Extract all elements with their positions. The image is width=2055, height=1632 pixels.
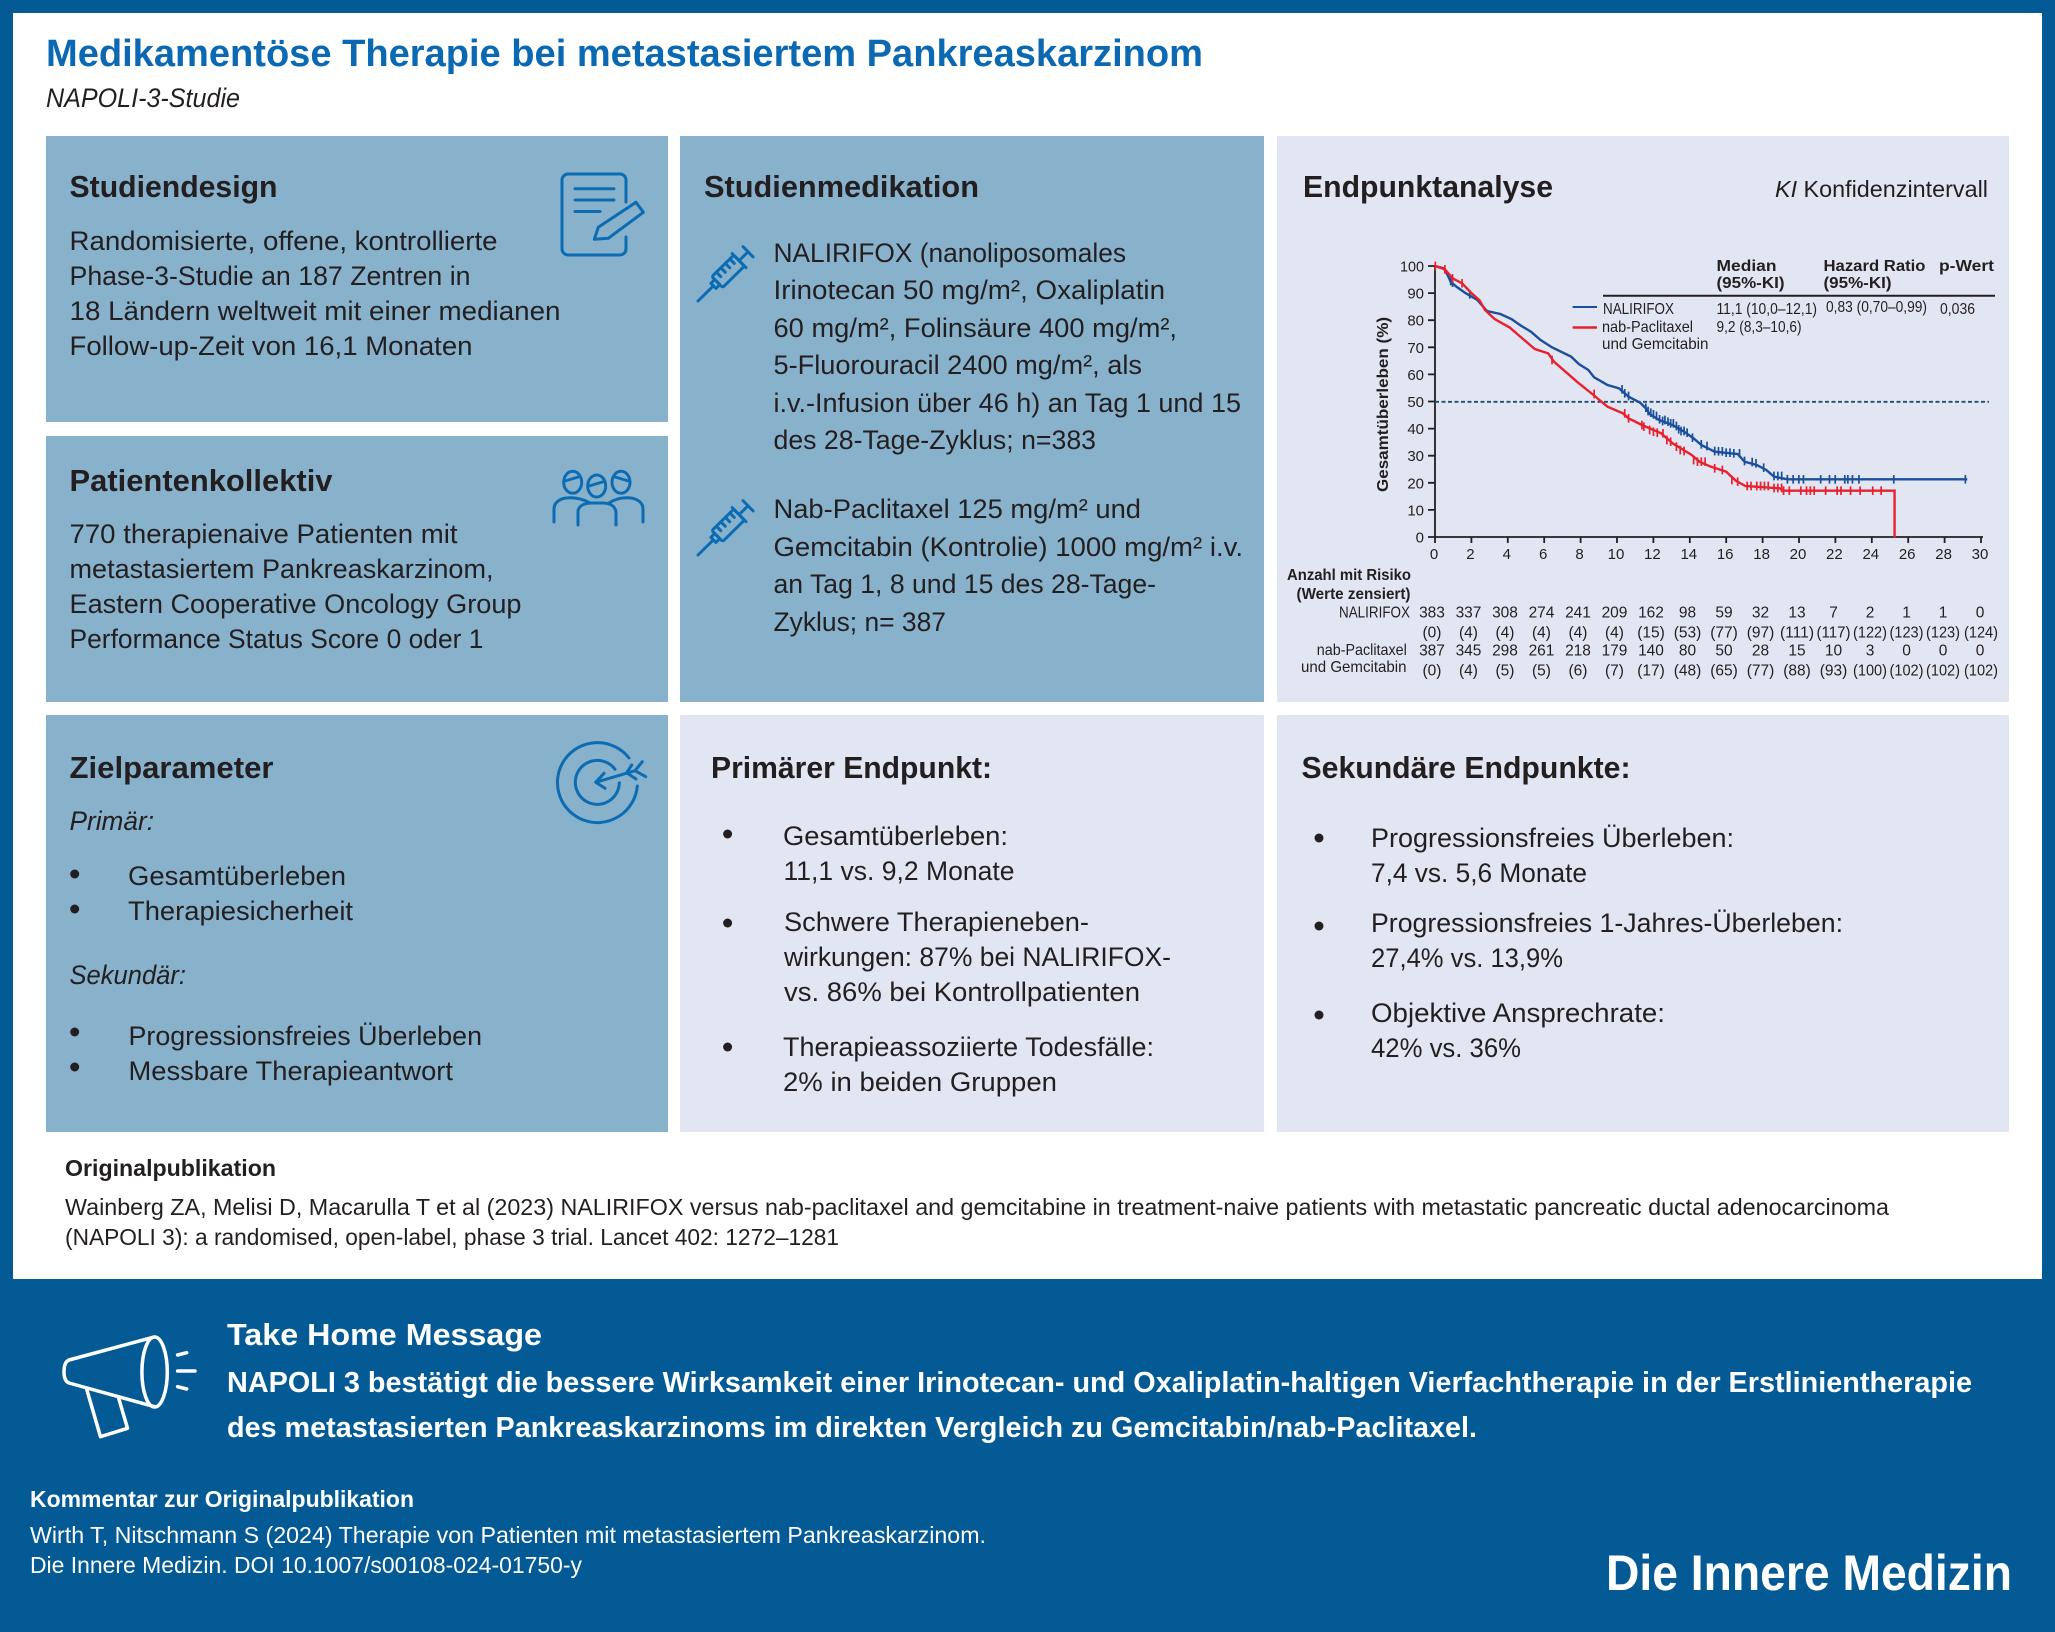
NALIRIFOX censored: (123) bbox=[1926, 624, 1960, 642]
body text: Follow-up-Zeit von 16,1 Monaten bbox=[70, 331, 472, 361]
panel: Zielparameter bbox=[46, 715, 668, 1132]
NALIRIFOX censored: (117) bbox=[1816, 624, 1850, 642]
primary list bbox=[70, 861, 353, 926]
body text: Eastern Cooperative Oncology Group bbox=[70, 589, 522, 619]
heading: Endpunktanalyse bbox=[1303, 169, 1553, 204]
x axis labels: 14 bbox=[1680, 546, 1697, 563]
take home message: NAPOLI 3 bestätigt die bessere Wirksamkeit einer Irinotecan- und Oxaliplatin-haltigen Vierfachtherapie in der Erstlinientherapie bbox=[227, 1367, 1972, 1399]
secondary list bbox=[70, 1021, 482, 1086]
row labels: Anzahl mit Risiko bbox=[1287, 567, 1411, 584]
nab-Paclitaxel at risk: 179 bbox=[1602, 642, 1627, 660]
nab-Paclitaxel censored: (0) bbox=[1423, 662, 1441, 680]
NALIRIFOX text: 5-Fluorouracil 2400 mg/m², als bbox=[774, 350, 1142, 380]
x axis labels: 12 bbox=[1644, 546, 1661, 563]
nab-Paclitaxel censored: (100) bbox=[1853, 662, 1887, 680]
result: one-year PFS: 27,4% vs. 13,9% bbox=[1371, 943, 1563, 973]
panel background bbox=[46, 436, 668, 702]
NALIRIFOX censored: (4) bbox=[1459, 624, 1478, 642]
x axis labels: 30 bbox=[1972, 546, 1988, 563]
result: treatment-related deaths bbox=[723, 1032, 1154, 1097]
panel: Studiendesign bbox=[46, 136, 668, 422]
nab-Paclitaxel at risk bbox=[1419, 642, 1985, 660]
NALIRIFOX censored: (4) bbox=[1496, 624, 1514, 642]
y axis labels: 10 bbox=[1407, 502, 1424, 519]
x axis labels: 8 bbox=[1575, 546, 1584, 563]
axes bbox=[1428, 266, 1983, 543]
NALIRIFOX at risk: 337 bbox=[1456, 604, 1481, 622]
legend and statistics: nab-Paclitaxel bbox=[1602, 319, 1693, 336]
row labels bbox=[1287, 567, 1411, 676]
panel background bbox=[1277, 715, 2009, 1132]
y axis labels: 50 bbox=[1407, 394, 1424, 411]
primary list: Therapiesicherheit bbox=[128, 896, 353, 926]
NALIRIFOX at risk: 0 bbox=[1976, 604, 1985, 622]
panel background bbox=[46, 715, 668, 1132]
nab-Paclitaxel at risk: 80 bbox=[1679, 642, 1696, 660]
panel: Studienmedikation bbox=[680, 136, 1264, 702]
x axis labels: 10 bbox=[1608, 546, 1624, 563]
x axis labels: 20 bbox=[1790, 546, 1806, 563]
NALIRIFOX censored: (53) bbox=[1674, 624, 1701, 642]
icon: syringe 2 bbox=[691, 499, 755, 562]
panel background bbox=[680, 136, 1264, 702]
heading: Studienmedikation bbox=[704, 169, 979, 204]
NALIRIFOX at risk: 162 bbox=[1638, 604, 1664, 622]
NALIRIFOX censored: (97) bbox=[1747, 624, 1774, 642]
row labels: NALIRIFOX bbox=[1339, 604, 1410, 622]
NALIRIFOX text bbox=[774, 238, 1241, 455]
nab-Paclitaxel censored: (48) bbox=[1674, 662, 1701, 680]
body text: 770 therapienaive Patienten mit bbox=[70, 519, 458, 549]
secondary label: Sekundär: bbox=[70, 960, 186, 990]
nab-Paclitaxel at risk: 0 bbox=[1939, 642, 1948, 660]
panel background bbox=[680, 715, 1264, 1132]
result: PFS: Progressionsfreies Überleben: bbox=[1371, 823, 1734, 853]
legend and statistics bbox=[1573, 299, 1975, 353]
Nab-Paclitaxel text: Nab-Paclitaxel 125 mg/m² und bbox=[774, 494, 1141, 524]
heading: Sekundäre Endpunkte: bbox=[1302, 750, 1630, 785]
result: adverse events: wirkungen: 87% bei NALIRIFOX- bbox=[783, 942, 1171, 972]
legend and statistics: und Gemcitabin bbox=[1602, 336, 1708, 353]
y axis labels bbox=[1400, 258, 1424, 546]
statistics table header: (95%-KI) bbox=[1716, 275, 1784, 292]
body text: 18 Ländern weltweit mit einer medianen bbox=[70, 296, 560, 326]
result: adverse events: Schwere Therapieneben- bbox=[784, 907, 1089, 937]
legend and statistics: 0,83 (0,70–0,99) bbox=[1826, 299, 1927, 316]
x axis labels: 4 bbox=[1503, 546, 1511, 563]
NALIRIFOX censored: (15) bbox=[1637, 624, 1665, 642]
nab-Paclitaxel at risk: 345 bbox=[1456, 642, 1481, 660]
table: number at risk bbox=[1287, 567, 1998, 680]
nab-Paclitaxel censored: (102) bbox=[1964, 662, 1998, 680]
statistics table header: p-Wert bbox=[1939, 258, 1995, 275]
nab-Paclitaxel censored: (65) bbox=[1710, 662, 1738, 680]
NALIRIFOX text: Irinotecan 50 mg/m², Oxaliplatin bbox=[774, 275, 1165, 305]
result: one-year PFS: Progressionsfreies 1-Jahres-Überleben: bbox=[1371, 908, 1843, 938]
result: treatment-related deaths: 2% in beiden Gruppen bbox=[783, 1067, 1057, 1097]
nab-Paclitaxel censored: (5) bbox=[1532, 662, 1551, 680]
nab-Paclitaxel censored: (102) bbox=[1926, 662, 1960, 680]
statistics table header bbox=[1603, 258, 1995, 296]
secondary list: Progressionsfreies Überleben bbox=[128, 1021, 482, 1051]
NALIRIFOX at risk: 383 bbox=[1419, 604, 1445, 622]
body text bbox=[70, 519, 522, 654]
y axis labels: 30 bbox=[1407, 448, 1424, 465]
result: response rate bbox=[1314, 998, 1665, 1063]
NALIRIFOX censored: (123) bbox=[1890, 624, 1924, 642]
panel background bbox=[46, 136, 668, 422]
nab-Paclitaxel censored bbox=[1423, 662, 1998, 680]
result: response rate: Objektive Ansprechrate: bbox=[1371, 998, 1665, 1028]
title: Medikamentöse Therapie bei metastasiertem Pankreaskarzinom bbox=[46, 33, 1203, 75]
NALIRIFOX at risk: 98 bbox=[1679, 604, 1696, 622]
NALIRIFOX text: i.v.-Infusion über 46 h) an Tag 1 und 15 bbox=[774, 388, 1241, 418]
y axis labels: 20 bbox=[1407, 475, 1424, 492]
original publication: Wainberg ZA, Melisi D, Macarulla T et al (2023) NALIRIFOX versus nab-paclitaxel and gemcitabine in treatment-naive patients with metastatic pancreatic ductal adenocarcinoma bbox=[65, 1194, 1889, 1220]
NALIRIFOX at risk: 241 bbox=[1565, 604, 1591, 622]
panel: Patientenkollektiv bbox=[46, 436, 668, 702]
curve: nab-Paclitaxel und Gemcitabin bbox=[1435, 262, 1895, 537]
heading: Zielparameter bbox=[70, 750, 274, 785]
x axis labels: 22 bbox=[1826, 546, 1843, 563]
panel background bbox=[1277, 136, 2009, 702]
NALIRIFOX at risk: 209 bbox=[1602, 604, 1627, 622]
y axis title: Gesamtüberleben (%) bbox=[1375, 317, 1392, 492]
NALIRIFOX censored: (111) bbox=[1780, 624, 1814, 642]
icon: megaphone bbox=[64, 1337, 195, 1437]
nab-Paclitaxel censored: (93) bbox=[1820, 662, 1847, 680]
result: overall survival: Gesamtüberleben: bbox=[783, 821, 1008, 851]
nab-Paclitaxel at risk: 298 bbox=[1492, 642, 1518, 660]
x axis labels: 0 bbox=[1430, 546, 1438, 563]
panel: Sekundäre Endpunkte bbox=[1277, 715, 2009, 1132]
result: one-year PFS bbox=[1314, 908, 1843, 973]
nab-Paclitaxel at risk: 28 bbox=[1752, 642, 1769, 660]
nab-Paclitaxel at risk: 15 bbox=[1788, 642, 1806, 660]
result: overall survival bbox=[723, 821, 1014, 886]
NALIRIFOX at risk: 1 bbox=[1939, 604, 1947, 622]
NALIRIFOX at risk: 308 bbox=[1492, 604, 1518, 622]
take home message: Take Home Message bbox=[227, 1317, 542, 1352]
nab-Paclitaxel censored: (7) bbox=[1605, 662, 1624, 680]
Nab-Paclitaxel text bbox=[774, 494, 1243, 637]
NALIRIFOX censored: (0) bbox=[1423, 624, 1441, 642]
NALIRIFOX at risk: 13 bbox=[1788, 604, 1806, 622]
nab-Paclitaxel censored: (5) bbox=[1496, 662, 1514, 680]
nab-Paclitaxel censored: (17) bbox=[1637, 662, 1665, 680]
y axis labels: 80 bbox=[1407, 313, 1424, 330]
y axis labels: 0 bbox=[1416, 530, 1424, 546]
secondary list: Messbare Therapieantwort bbox=[128, 1056, 453, 1086]
heading: Patientenkollektiv bbox=[70, 463, 333, 498]
original publication bbox=[65, 1155, 1889, 1250]
heading: Studiendesign bbox=[70, 169, 278, 204]
x axis labels: 26 bbox=[1899, 546, 1916, 563]
50 percent reference line bbox=[1435, 401, 1989, 403]
result: response rate: 42% vs. 36% bbox=[1371, 1033, 1521, 1063]
row labels: (Werte zensiert) bbox=[1296, 586, 1410, 603]
panel: Primärer Endpunkt bbox=[680, 715, 1264, 1132]
y axis labels: 40 bbox=[1407, 421, 1424, 438]
panel: Endpunktanalyse bbox=[1277, 136, 2009, 702]
x axis labels bbox=[1430, 546, 1988, 563]
result: adverse events bbox=[723, 907, 1171, 1007]
NALIRIFOX at risk: 59 bbox=[1715, 604, 1733, 622]
nab-Paclitaxel censored: (4) bbox=[1459, 662, 1478, 680]
commentary reference bbox=[30, 1486, 986, 1578]
icon: syringe 1 bbox=[691, 245, 755, 308]
commentary reference: Kommentar zur Originalpublikation bbox=[30, 1486, 414, 1512]
x axis labels: 28 bbox=[1935, 546, 1952, 563]
take home message: des metastasierten Pankreaskarzinoms im direkten Vergleich zu Gemcitabin/nab-Paclitaxel. bbox=[227, 1412, 1477, 1444]
body text: metastasiertem Pankreaskarzinom, bbox=[70, 554, 493, 584]
x axis labels: 18 bbox=[1753, 546, 1770, 563]
primary list: Gesamtüberleben bbox=[128, 861, 346, 891]
nab-Paclitaxel at risk: 140 bbox=[1638, 642, 1664, 660]
result: PFS: 7,4 vs. 5,6 Monate bbox=[1371, 858, 1587, 888]
nab-Paclitaxel at risk: 218 bbox=[1565, 642, 1591, 660]
icon: group of people bbox=[554, 471, 643, 525]
nab-Paclitaxel censored: (6) bbox=[1569, 662, 1587, 680]
nab-Paclitaxel censored: (88) bbox=[1783, 662, 1811, 680]
icon: target with arrow bbox=[557, 743, 646, 823]
nab-Paclitaxel at risk: 261 bbox=[1529, 642, 1554, 660]
icon: document with pencil bbox=[562, 174, 643, 255]
result: PFS bbox=[1314, 823, 1734, 888]
legend and statistics: 0,036 bbox=[1940, 301, 1975, 318]
nab-Paclitaxel censored: (102) bbox=[1890, 662, 1924, 680]
NALIRIFOX text: 60 mg/m², Folinsäure 400 mg/m², bbox=[774, 313, 1177, 343]
NALIRIFOX at risk: 7 bbox=[1829, 604, 1838, 622]
statistics table header: Median bbox=[1716, 258, 1776, 275]
NALIRIFOX censored: (77) bbox=[1710, 624, 1738, 642]
body text: Phase-3-Studie an 187 Zentren in bbox=[70, 261, 470, 291]
nab-Paclitaxel censored: (77) bbox=[1747, 662, 1774, 680]
result: overall survival: 11,1 vs. 9,2 Monate bbox=[784, 856, 1014, 886]
Nab-Paclitaxel text: an Tag 1, 8 und 15 des 28-Tage- bbox=[774, 569, 1156, 599]
x axis labels: 2 bbox=[1466, 546, 1475, 563]
chart: Kaplan-Meier survival bbox=[1375, 258, 1995, 563]
nab-Paclitaxel at risk: 3 bbox=[1866, 642, 1874, 660]
NALIRIFOX text: NALIRIFOX (nanoliposomales bbox=[774, 238, 1126, 268]
result: treatment-related deaths: Therapieassoziierte Todesfälle: bbox=[783, 1032, 1154, 1062]
Nab-Paclitaxel text: Gemcitabin (Kontrolie) 1000 mg/m² i.v. bbox=[774, 532, 1243, 562]
legend and statistics: 9,2 (8,3–10,6) bbox=[1716, 319, 1802, 336]
original publication: Originalpublikation bbox=[65, 1155, 276, 1181]
result: adverse events: vs. 86% bei Kontrollpatienten bbox=[784, 977, 1140, 1007]
abbreviation note: KI Konfidenzintervall bbox=[1775, 176, 1988, 202]
NALIRIFOX censored: (122) bbox=[1853, 624, 1887, 642]
statistics table header: Hazard Ratio bbox=[1824, 258, 1926, 275]
NALIRIFOX text: des 28-Tage-Zyklus; n=383 bbox=[774, 425, 1096, 455]
journal name: Die Innere Medizin bbox=[1606, 1545, 2012, 1601]
nab-Paclitaxel at risk: 10 bbox=[1825, 642, 1842, 660]
NALIRIFOX at risk bbox=[1419, 604, 1985, 622]
subtitle: NAPOLI-3-Studie bbox=[46, 83, 240, 113]
NALIRIFOX censored: (124) bbox=[1964, 624, 1998, 642]
nab-Paclitaxel at risk: 50 bbox=[1715, 642, 1733, 660]
x axis labels: 6 bbox=[1539, 546, 1547, 563]
NALIRIFOX at risk: 274 bbox=[1529, 604, 1555, 622]
primary label: Primär: bbox=[70, 806, 154, 836]
Nab-Paclitaxel text: Zyklus; n= 387 bbox=[774, 607, 946, 637]
commentary reference: Wirth T, Nitschmann S (2024) Therapie von Patienten mit metastasiertem Pankreaskarzinom. bbox=[30, 1522, 986, 1548]
take home message bbox=[227, 1317, 1972, 1444]
row labels: und Gemcitabin bbox=[1301, 659, 1406, 676]
nab-Paclitaxel at risk: 387 bbox=[1419, 642, 1445, 660]
nab-Paclitaxel at risk: 0 bbox=[1902, 642, 1911, 660]
NALIRIFOX at risk: 32 bbox=[1752, 604, 1769, 622]
body text: Randomisierte, offene, kontrollierte bbox=[70, 226, 498, 256]
white content area bbox=[13, 13, 2042, 1279]
curve: NALIRIFOX bbox=[1435, 266, 1967, 484]
NALIRIFOX censored bbox=[1423, 624, 1998, 642]
y axis labels: 60 bbox=[1407, 367, 1424, 384]
NALIRIFOX at risk: 1 bbox=[1902, 604, 1911, 622]
y axis labels: 70 bbox=[1407, 340, 1424, 357]
legend and statistics: 11,1 (10,0–12,1) bbox=[1716, 301, 1817, 318]
commentary reference: Die Innere Medizin. DOI 10.1007/s00108-024-01750-y bbox=[30, 1552, 582, 1578]
NALIRIFOX at risk: 2 bbox=[1866, 604, 1874, 622]
x axis labels: 16 bbox=[1717, 546, 1734, 563]
body text bbox=[70, 226, 560, 361]
heading: Primärer Endpunkt: bbox=[711, 750, 992, 785]
NALIRIFOX censored: (4) bbox=[1605, 624, 1624, 642]
y axis labels: 100 bbox=[1400, 258, 1424, 276]
NALIRIFOX censored: (4) bbox=[1569, 624, 1587, 642]
statistics table header: (95%-KI) bbox=[1824, 275, 1892, 292]
original publication: (NAPOLI 3): a randomised, open-label, phase 3 trial. Lancet 402: 1272–1281 bbox=[65, 1224, 839, 1250]
NALIRIFOX censored: (4) bbox=[1532, 624, 1551, 642]
x axis labels: 24 bbox=[1862, 546, 1879, 563]
nab-Paclitaxel at risk: 0 bbox=[1976, 642, 1985, 660]
body text: Performance Status Score 0 oder 1 bbox=[70, 624, 484, 654]
row labels: nab-Paclitaxel bbox=[1317, 642, 1407, 659]
y axis labels: 90 bbox=[1407, 286, 1424, 303]
legend and statistics: NALIRIFOX bbox=[1603, 301, 1674, 318]
